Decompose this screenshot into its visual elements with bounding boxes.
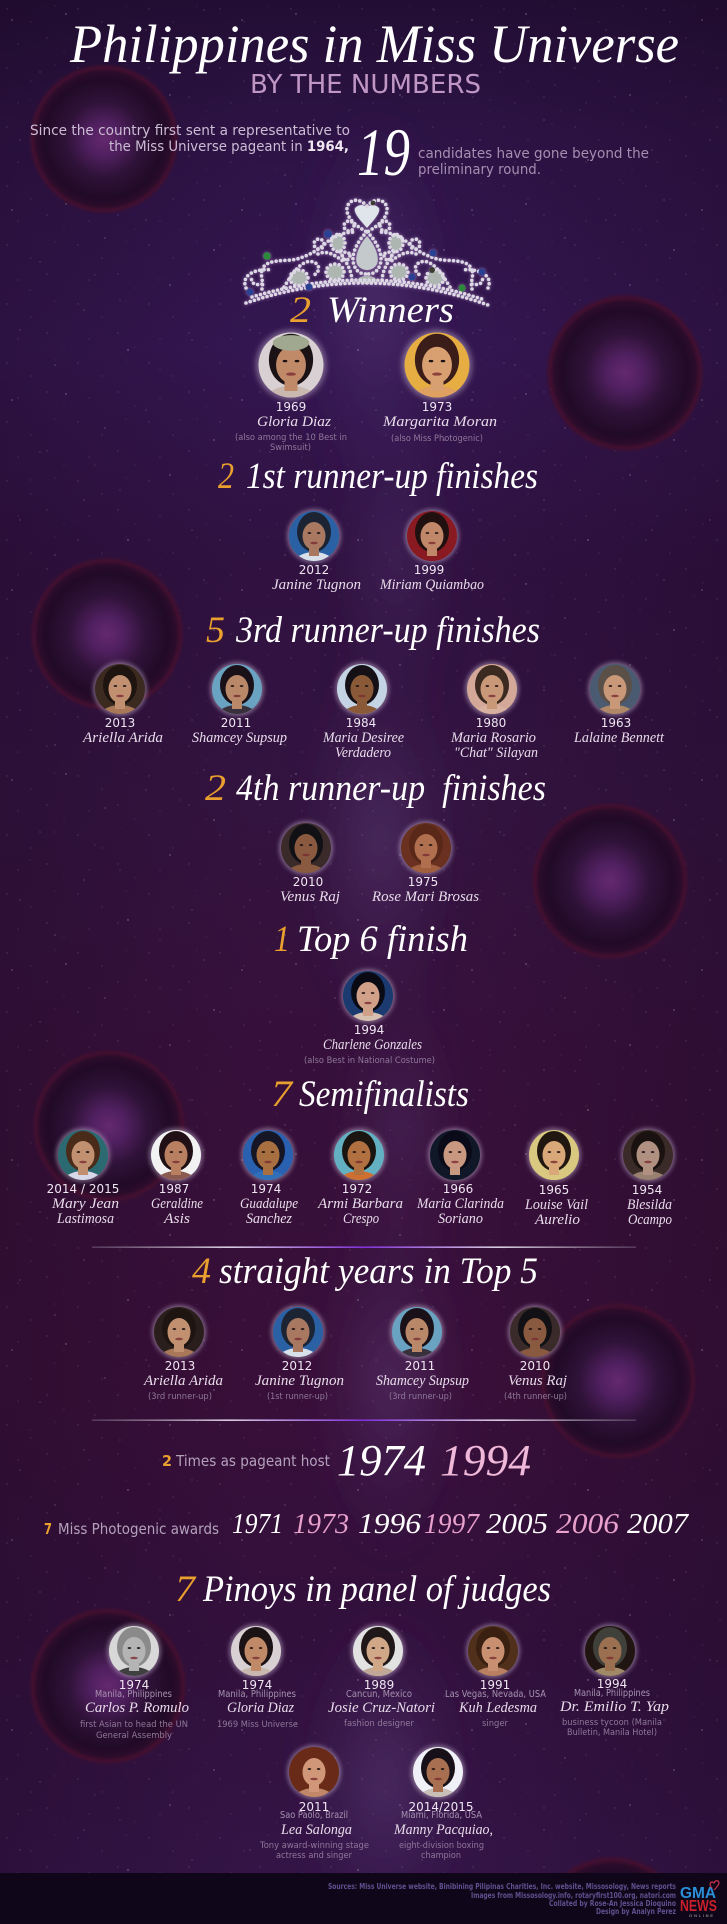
heading: 3rd runner-up: 5 [206,610,225,651]
panel: photogenic awards: 1997 [424,1509,480,1540]
panel: straight years in top 5: Janine Tugnon [255,1373,344,1389]
panel: 3rd runner-up: 1963 [601,716,631,730]
panel: 1st runner-up: Janine Tugnon [272,577,361,593]
panel: semifinalists: Geraldine [151,1196,203,1212]
panel: judges: first Asian to head the UN [80,1720,188,1730]
panel: judges: 1991 [480,1678,510,1692]
panel: winners: 1969 [276,400,306,414]
intro text: 19 [357,114,410,190]
portrait: Guadalupe Sanchez [241,1128,295,1197]
panel: judges: Manila, Philippines [218,1689,296,1700]
sources text: Collated by Rose-An Jessica Dioquino [549,1899,676,1908]
panel: judges: 2014/2015 [408,1800,474,1814]
panel: 4th runner-up: 1975 [408,875,438,889]
portrait: Janine Tugnon [287,509,341,578]
panel: semifinalists: 1974 [251,1182,281,1196]
panel: judges: Gloria Diaz [227,1700,294,1716]
portrait: Rose Mari Brosas [399,821,453,890]
panel: 4th runner-up: Venus Raj [280,889,340,905]
panel: straight years in top 5 [143,1251,567,1402]
panel: winners [235,290,497,453]
panel: 3rd runner-up: Verdadero [335,745,391,761]
panel: semifinalists: Asis [163,1211,190,1227]
logo: GMA News Online: ONLINE [689,1913,713,1918]
panel: straight years in top 5: (4th runner-up) [504,1392,567,1402]
portrait: Lea Salonga [287,1745,341,1814]
panel: 3rd runner-up: 1980 [476,716,506,730]
panel: 4th runner-up [205,768,546,905]
panel: 3rd runner-up: Shamcey Supsup [192,730,287,746]
panel: semifinalists: Blesilda [627,1197,672,1213]
panel: judges: Josie Cruz-Natori [328,1700,435,1716]
panel: straight years in top 5: (1st runner-up) [267,1392,328,1402]
heading: 4th runner-up: 2 [205,768,226,809]
portrait: Venus Raj [279,821,333,890]
panel: straight years in top 5: Shamcey Supsup [376,1373,469,1389]
heading: 4th runner-up: 4th runner-up finishes [236,768,546,809]
heading: 1st runner-up: 1st runner-up finishes [246,456,538,497]
panel: semifinalists: Lastimosa [56,1211,114,1227]
portrait: Manny Pacquiao [411,1745,465,1814]
panel: pageant host: Times as pageant host [175,1452,330,1470]
panel: semifinalists: Guadalupe [240,1196,298,1212]
panel: pageant host [162,1436,531,1485]
portrait: Gloria Diaz [256,330,326,420]
panel: semifinalists: Sanchez [246,1211,292,1227]
panel: judges: 2011 [299,1800,329,1814]
panel: 3rd runner-up: 2013 [105,716,135,730]
panel: judges: Cancun, Mexico [346,1689,412,1700]
panel: judges: 1989 [364,1678,394,1692]
panel: judges: fashion designer [344,1719,414,1729]
panel: photogenic awards: 7 [44,1520,52,1538]
panel: 3rd runner-up: 1984 [346,716,376,730]
panel: straight years in top 5: 2012 [282,1359,312,1373]
panel: judges: Tony award-winning stage [259,1841,369,1851]
panel: semifinalists: Aurelio [534,1212,581,1228]
panel: winners: Gloria Diaz [257,414,331,430]
panel: judges: eight-division boxing [399,1841,484,1851]
panel: 3rd runner-up: Lalaine Bennett [573,730,665,746]
panel: 1st runner-up: 2012 [299,563,329,577]
panel: top 6 [274,919,468,1066]
subtitle: BY THE NUMBERS [250,70,481,100]
portrait: Carlos P. Romulo [107,1624,161,1693]
panel: judges: Manny Pacquiao, [393,1822,493,1838]
panel: semifinalists: Crespo [343,1211,379,1227]
sources text [328,1882,676,1916]
panel: straight years in top 5: Venus Raj [508,1373,567,1389]
panel: judges [80,1569,670,1861]
panel: semifinalists: Soriano [438,1211,483,1227]
panel: semifinalists: Mary Jean [51,1196,119,1212]
panel: photogenic awards: 2007 [627,1509,689,1540]
panel: semifinalists: Louise Vail [524,1197,588,1213]
panel: judges: General Assembly [96,1731,173,1741]
panel: top 6: (also Best in National Costume) [304,1056,435,1066]
panel: 3rd runner-up: "Chat" Silayan [454,745,538,761]
portrait: Blesilda Ocampo [621,1128,675,1197]
heading: top 6: 1 [274,919,290,960]
panel: 4th runner-up: Rose Mari Brosas [371,889,479,905]
panel: 3rd runner-up: 2011 [221,716,251,730]
portrait: Janine Tugnon [271,1305,325,1374]
heading: 1st runner-up: 2 [218,456,234,497]
portrait: Maria Desiree Verdadero [335,662,389,731]
portrait: Armi Barbara Crespo [332,1128,386,1197]
portrait: Miriam Quiambao [405,509,459,578]
panel: straight years in top 5: (3rd runner-up) [389,1392,452,1402]
panel: photogenic awards: 2005 [486,1509,548,1540]
heading: top 6: Top 6 finish [297,919,468,960]
panel: judges: Dr. Emilio T. Yap [559,1699,670,1715]
portrait: Shamcey Supsup [390,1305,444,1374]
heading: semifinalists: Semifinalists [299,1074,469,1115]
panel: judges: Carlos P. Romulo [85,1700,189,1716]
panel: semifinalists: 1987 [159,1182,189,1196]
panel: judges: Las Vegas, Nevada, USA [445,1689,546,1700]
panel: judges: Kuh Ledesma [458,1700,537,1716]
portrait: Geraldine Asis [149,1128,203,1197]
heading: judges: Pinoys in panel of judges [202,1569,551,1610]
title: Philippines in Miss Universe [69,14,679,74]
intro text: candidates have gone beyond the [418,146,649,162]
panel: judges: Bulletin, Manila Hotel) [567,1728,657,1738]
portrait: Mary Jean Lastimosa [56,1128,110,1197]
panel: judges: Manila, Philippines [95,1689,172,1700]
panel: 1st runner-up: Miriam Quiambao [379,577,484,593]
heading: straight years: straight years in Top 5 [219,1251,538,1292]
panel: judges: Manila, Philippines [574,1688,650,1699]
heading: winners: Winners [327,290,454,331]
panel: judges: singer [482,1719,508,1729]
panel: winners: 1973 [422,400,452,414]
panel: 3rd runner-up: Maria Rosario [450,730,536,746]
heading: judges: 7 [175,1569,197,1610]
panel: semifinalists: 2014 / 2015 [47,1182,119,1196]
portrait: Chat Silayan [465,662,519,731]
panel: judges: Sao Paolo, Brazil [280,1810,348,1821]
footer [0,1873,727,1924]
panel: judges: 1969 Miss Universe [217,1720,298,1730]
panel: judges: 1994 [597,1677,627,1691]
icon: tiara [245,200,489,305]
panel: straight years in top 5: Ariella Arida [143,1373,223,1389]
panel: photogenic awards: 1973 [293,1509,349,1540]
panel: 4th runner-up: 2010 [293,875,323,889]
panel: straight years in top 5: (3rd runner-up) [148,1392,212,1402]
intro text: preliminary round. [418,162,541,178]
panel: photogenic awards: 1971 [232,1509,283,1540]
portrait: Ariella Arida [93,662,147,731]
panel: 3rd runner-up [82,610,665,761]
panel: photogenic awards: 1996 [358,1509,421,1540]
intro text: the Miss Universe pageant in 1964, [109,139,349,155]
panel: semifinalists: Ocampo [628,1212,672,1228]
portrait: Emilio T. Yap [583,1624,637,1693]
panel: semifinalists: 1972 [342,1182,372,1196]
panel: 1st runner-up [218,456,538,593]
panel: judges: business tycoon (Manila [562,1718,662,1728]
panel: judges: actress and singer [276,1851,352,1861]
portrait: Gloria Diaz [229,1624,283,1693]
panel: pageant host: 1974 [337,1436,426,1485]
panel: photogenic awards: Miss Photogenic awards [58,1520,219,1538]
panel: photogenic awards [44,1509,689,1540]
portrait: Kuh Ledesma [466,1624,520,1693]
panel: photogenic awards: 2006 [556,1509,619,1540]
intro text: Since the country first sent a representative to [30,123,350,139]
panel: 1st runner-up: 1999 [414,563,444,577]
panel: pageant host: 2 [162,1452,172,1470]
portrait: Maria Clarinda Soriano [428,1128,482,1197]
panel: 3rd runner-up: Maria Desiree [322,730,404,746]
panel: 3rd runner-up: Ariella Arida [82,730,163,746]
portrait: Charlene Gonzales [341,969,395,1038]
panel: pageant host: 1994 [440,1436,531,1485]
portrait: Venus Raj [508,1305,562,1374]
heading: semifinalists: 7 [271,1074,294,1115]
panel: judges: Lea Salonga [280,1822,352,1838]
panel: winners: Swimsuit) [270,443,311,453]
heading: straight years: 4 [192,1251,211,1292]
panel: semifinalists: Armi Barbara [317,1196,403,1212]
panel: winners: (also Miss Photogenic) [391,434,483,444]
panel: semifinalists: 1965 [539,1183,569,1197]
portrait: Louise Vail Aurelio [527,1128,581,1197]
panel: top 6: 1994 [354,1023,384,1037]
portrait: Lalaine Bennett [588,662,642,731]
panel: winners: (also among the 10 Best in [235,433,347,443]
panel: semifinalists: 1954 [632,1183,662,1197]
sources text: Design by Analyn Perez [596,1907,676,1916]
panel: winners: Margarita Moran [382,414,497,430]
portrait: Ariella Arida [152,1305,206,1374]
panel: semifinalists [47,1074,675,1228]
panel: straight years in top 5: 2013 [165,1359,195,1373]
portrait: Josie Cruz-Natori [351,1624,405,1693]
panel: semifinalists: 1966 [443,1182,473,1196]
panel: judges: 1974 [119,1678,149,1692]
panel: judges: 1974 [242,1678,272,1692]
panel: semifinalists: Maria Clarinda [416,1196,504,1212]
portrait: Shamcey Supsup [210,662,264,731]
intro text [30,114,649,190]
panel: straight years in top 5: 2011 [405,1359,435,1373]
heading: 3rd runner-up: 3rd runner-up finishes [235,610,540,651]
panel: judges: champion [421,1851,461,1861]
logo: GMA News Online [680,1881,719,1918]
logo: GMA News Online: GMA [680,1885,716,1902]
panel: judges: Miami, Florida, USA [401,1810,482,1821]
panel: top 6: Charlene Gonzales [323,1037,422,1053]
portrait: Margarita Moran [402,330,472,420]
logo: GMA News Online: NEWS [680,1898,717,1915]
panel: straight years in top 5: 2010 [520,1359,550,1373]
heading: winners: 2 [290,290,311,331]
